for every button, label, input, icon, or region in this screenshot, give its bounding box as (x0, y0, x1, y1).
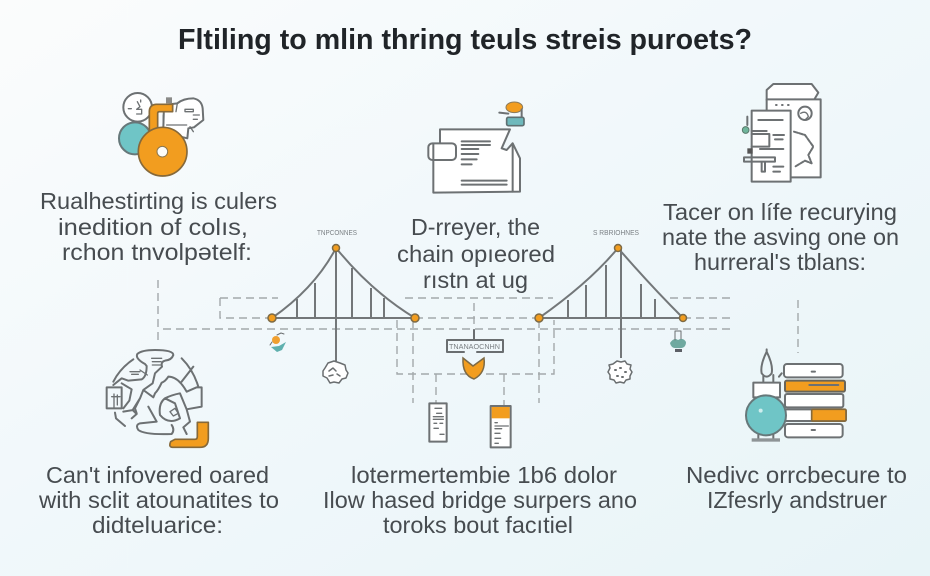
text block: bottom left: with sclit atounatites to (38, 487, 279, 513)
gear blob dots (615, 368, 626, 377)
icon: gear blob (608, 361, 632, 383)
text block: bottom right: Nedivc orrcbecure to (686, 462, 907, 488)
text block: bottom right: IZfesrly andstruer (707, 487, 887, 513)
bridge cables and deck (272, 248, 415, 361)
text block: top right: Tacer on lífe recurying (663, 199, 897, 225)
bridge anchor right (680, 314, 686, 322)
text block: bottom left: didteluarice: (92, 512, 223, 538)
text block: top left (40, 188, 277, 265)
text block: bottom centre: Ilow hased bridge surpers ano (323, 487, 637, 513)
text block: top centre: rıstn at ug (423, 267, 528, 293)
bridge anchor left (535, 314, 543, 322)
text block: bottom centre (323, 462, 637, 538)
text block: bottom right (686, 462, 907, 513)
icon: brain (323, 361, 348, 383)
icon: document with tag (428, 102, 524, 193)
dashed connector network (158, 280, 798, 405)
text block: top left: rchon tnvolpətelf: (62, 239, 252, 265)
bridge anchor left (268, 314, 276, 322)
bridge: right (535, 230, 686, 383)
icon: small document right (491, 406, 511, 447)
text block: top right: nate the asving one on (662, 224, 899, 250)
icon: gears and speech cluster (119, 93, 203, 176)
bridge tower node (332, 244, 340, 252)
text block: bottom centre: toroks bout facıtiel (383, 512, 573, 538)
icon: small document left (429, 403, 447, 442)
title: Fltiling to mlin thring teuls streis puroets? (178, 24, 752, 56)
text block: top left: Rualhestirting is culers (40, 188, 277, 214)
text block: top right (662, 199, 899, 275)
text block: top right: hurreral's tblans: (694, 249, 866, 275)
bridge tower node (614, 244, 622, 252)
text block: bottom left (38, 462, 279, 538)
diagram label box: TNANAOCNHN (449, 344, 500, 351)
diagram label box (447, 340, 503, 352)
text block: bottom centre: lotermertembie 1b6 dolor (351, 462, 617, 488)
icon: orange shield (463, 358, 484, 379)
icon: globe lamp and book stack (746, 349, 846, 442)
icon: small plant (670, 331, 686, 352)
text block: top centre: chain opıeored (397, 241, 555, 267)
icon: small figure (270, 333, 286, 352)
icon: maze circle (107, 350, 208, 447)
bridge cables and deck (539, 248, 683, 358)
text block: top left: inedition of colıs, (58, 214, 248, 240)
label: right bridge: S RBRIOHNES (593, 230, 639, 237)
icon: stacked documents and gears (742, 84, 821, 182)
text block: bottom left: Can't infovered oared (46, 462, 269, 488)
bridge anchor right (411, 314, 419, 322)
text block: top centre: D-rreyer, the (411, 214, 540, 240)
text block: top centre (397, 214, 555, 293)
bridge: left (268, 230, 419, 383)
label: left bridge: TNPCONNES (317, 230, 357, 237)
